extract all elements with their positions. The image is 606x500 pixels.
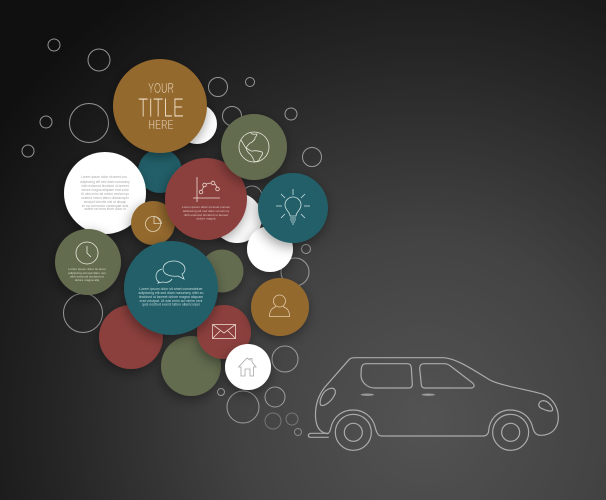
- lorem text: dolore magna aliquam erat volut: [81, 188, 129, 192]
- icon: line chart: [193, 177, 220, 202]
- title text: TITLE: [138, 92, 184, 123]
- olive clock circle: [55, 229, 121, 295]
- rear wheel: [335, 414, 371, 450]
- lorem text: autem vel eum iriure dolor in: [84, 207, 126, 211]
- title text: [138, 80, 184, 132]
- lorem text: quis nostrud exerci tation ullamcorper: [142, 302, 201, 306]
- lorem text: nibh euismod tincidunt ut laoreet: [81, 184, 129, 188]
- tail light: [320, 388, 335, 405]
- lorem text: Lorem ipsum dolor sit amet: [68, 267, 106, 271]
- lorem text: Lorem ipsum dolor sit amet consectetuer: [139, 287, 203, 291]
- icon: pie chart: [146, 216, 162, 232]
- lorem text: Lorem ipsum dolor sit amet consec: [182, 205, 230, 209]
- icon: person: [270, 295, 290, 316]
- lorem text: nibh euismod tincidunt ut: [70, 274, 104, 278]
- lorem text: nostrud exerci tation ullamcorper: [81, 196, 130, 200]
- icon: light bulb: [276, 189, 310, 224]
- lorem text: [68, 267, 106, 282]
- title text: YOUR: [148, 80, 174, 97]
- teal circle behind title: [138, 149, 182, 193]
- olive bottom circle: [161, 336, 221, 396]
- door handles: [361, 393, 374, 396]
- teal bulb circle: [258, 173, 328, 243]
- white circle behind bulb: [212, 193, 262, 243]
- lorem text: adipiscing elit sed diam nonummy: [183, 209, 230, 213]
- head light: [539, 401, 553, 411]
- car outline: [308, 358, 558, 450]
- lorem text: Lorem ipsum dolor sit amet con: [81, 175, 127, 179]
- small brown pie circle: [131, 201, 175, 245]
- lorem text: [139, 287, 204, 306]
- olive small circle: [200, 250, 244, 292]
- outline bubbles: [22, 39, 322, 436]
- tail pipe: [308, 433, 328, 437]
- icon: house: [238, 358, 256, 376]
- white circle lower: [247, 226, 293, 272]
- red chart circle: [165, 158, 247, 240]
- red large circle: [99, 305, 163, 369]
- icon: envelope: [212, 324, 236, 338]
- lorem text: suscipit lobortis nisl ut aliquip: [84, 200, 126, 204]
- icon: globe: [239, 132, 269, 162]
- lorem text: dolore magna: [197, 216, 216, 220]
- lorem text: [182, 205, 230, 220]
- icon: clock: [76, 242, 98, 264]
- white home circle: [225, 344, 271, 390]
- lorem text: Ut wisi enim ad minim veniam qu: [81, 192, 129, 196]
- lorem text: adipiscing elit sed diam nonummy: [80, 180, 130, 184]
- white circle behind title: [177, 104, 217, 144]
- lorem text: adipiscing elit sed diam nonummy nibh eu: [139, 291, 204, 295]
- lorem text: erat volutpat. Ut wisi enim ad minim veni: [140, 299, 203, 303]
- icon: speech bubbles: [156, 261, 185, 283]
- front wheel: [493, 414, 529, 450]
- brown person circle: [251, 278, 309, 336]
- lorem text: ex ea commodo consequat duis: [82, 204, 129, 208]
- title text: HERE: [148, 117, 174, 132]
- lorem text: dolore magna aliq: [75, 278, 100, 282]
- olive globe circle: [221, 114, 287, 180]
- lorem text: nibh euismod tincidunt ut laoreet: [184, 213, 228, 217]
- lorem text: adipiscing elit sed diam non: [68, 271, 106, 275]
- car body: [315, 358, 558, 436]
- white text circle: [64, 152, 146, 234]
- rear window: [361, 364, 412, 388]
- red mail circle: [197, 305, 251, 359]
- title circle: [113, 59, 207, 153]
- lorem text: [80, 175, 130, 211]
- lorem text: tincidunt ut laoreet dolore magna aliquam: [139, 295, 203, 299]
- front window: [420, 364, 474, 388]
- teal chat circle: [124, 241, 218, 335]
